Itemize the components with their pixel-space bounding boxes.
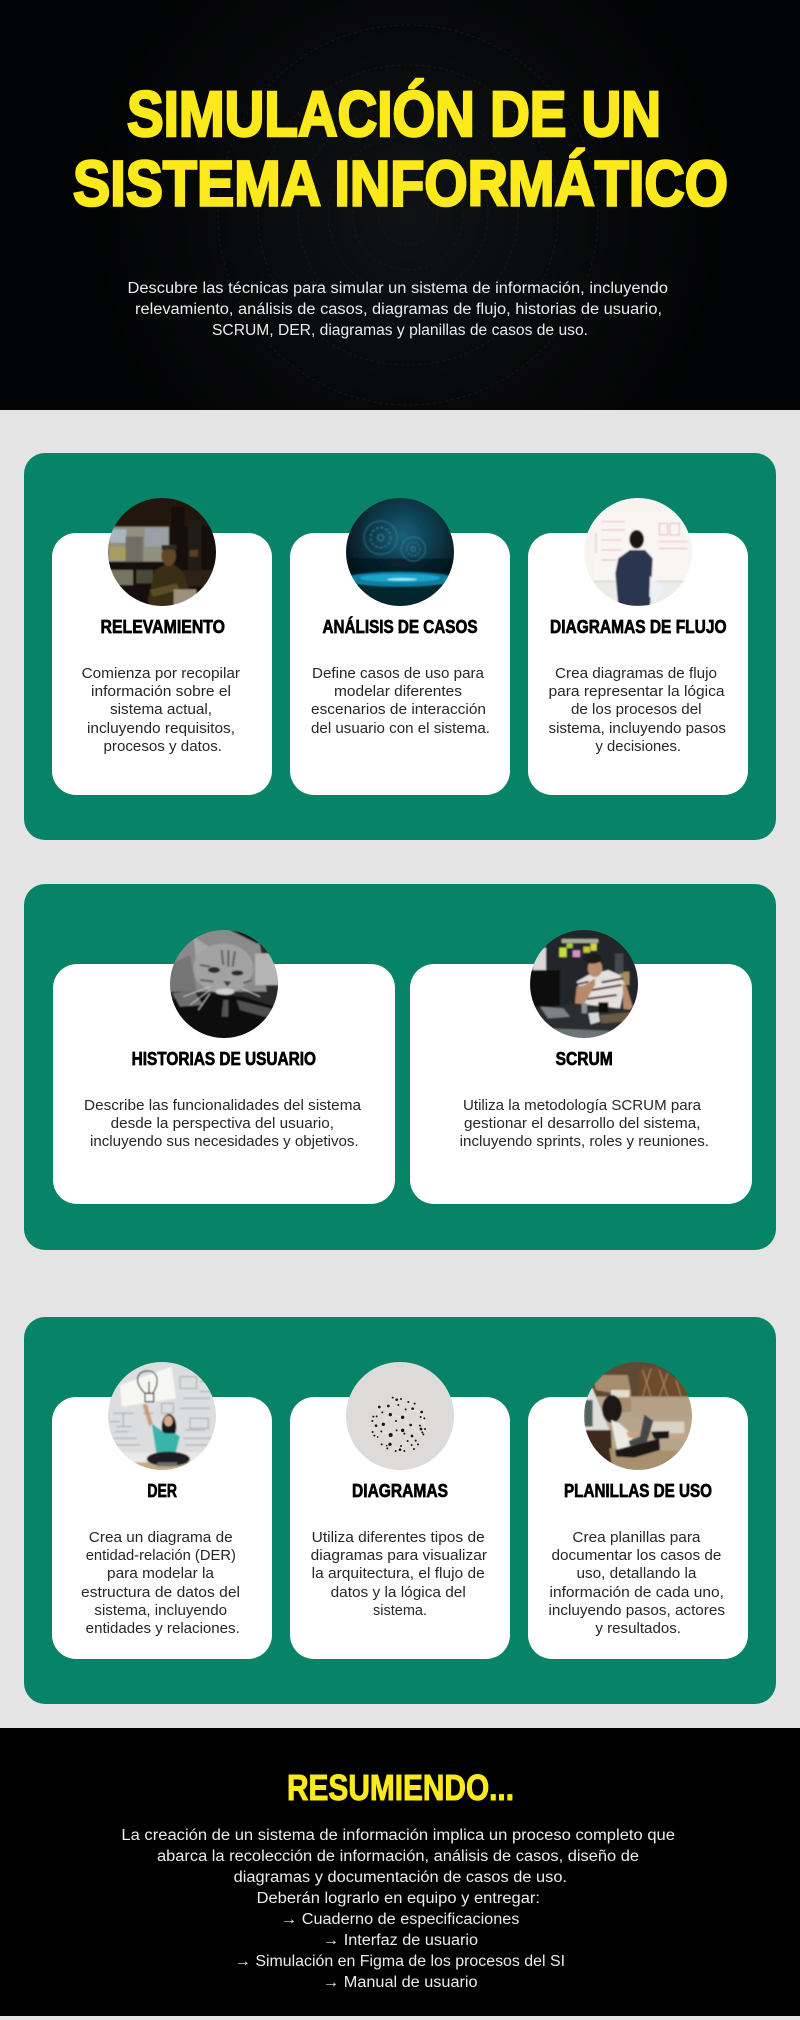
heading: DER — [147, 1480, 177, 1501]
footer text: → Cuaderno de especificaciones — [281, 1911, 520, 1928]
body text: Define casos de uso para — [312, 665, 485, 682]
photo: man at whiteboard — [584, 498, 692, 606]
body text: para modelar la — [107, 1565, 215, 1582]
body text — [548, 665, 726, 755]
footer text: → Manual de usuario — [323, 1974, 478, 1991]
body text — [84, 1097, 362, 1150]
body text: Crea un diagrama de — [89, 1529, 233, 1546]
body text: del usuario con el sistema. — [311, 720, 490, 737]
card: diagramas de flujo — [528, 490, 748, 795]
body text: incluyendo pasos, actores — [548, 1602, 725, 1619]
footer text: → Interfaz de usuario — [323, 1932, 478, 1949]
photo: developer at desk — [530, 930, 638, 1038]
footer text: Deberán lograrlo en equipo y entregar: — [257, 1890, 540, 1907]
body text — [311, 1529, 487, 1619]
body text: la arquitectura, el flujo de — [312, 1565, 485, 1582]
body text: Comienza por recopilar — [82, 665, 240, 682]
body text: sistema. — [373, 1602, 427, 1619]
body text: sistema, incluyendo — [94, 1602, 227, 1619]
body text: y resultados. — [595, 1620, 681, 1637]
heading: HISTORIAS DE USUARIO — [132, 1048, 316, 1069]
panel: first row — [24, 453, 776, 840]
body text — [82, 665, 240, 755]
body text: desde la perspectiva del usuario, — [111, 1115, 334, 1132]
title: SIMULACIÓN DE UN — [127, 78, 661, 150]
heading: RELEVAMIENTO — [100, 616, 225, 637]
body text: datos y la lógica del — [331, 1584, 466, 1601]
card: diagramas — [290, 1355, 510, 1659]
heading: DIAGRAMAS — [352, 1480, 448, 1501]
footer band — [0, 1728, 800, 2016]
body text: Describe las funcionalidades del sistema — [84, 1097, 362, 1114]
body text — [81, 1529, 240, 1637]
footer text: diagramas y documentación de casos de uso. — [234, 1869, 567, 1886]
intro text: SCRUM, DER, diagramas y planillas de casos de uso. — [212, 322, 588, 339]
body text: Crea planillas para — [572, 1529, 701, 1546]
card: der — [52, 1355, 272, 1659]
body text: sistema actual, — [110, 701, 212, 718]
heading: ANÁLISIS DE CASOS — [322, 616, 478, 637]
body text: entidad-relación (DER) — [86, 1547, 236, 1564]
panel: second row — [24, 884, 776, 1250]
body text: incluyendo sprints, roles y reuniones. — [460, 1133, 709, 1150]
body text: entidades y relaciones. — [86, 1620, 240, 1637]
body text: incluyendo requisitos, — [87, 720, 235, 737]
heading: PLANILLAS DE USO — [564, 1480, 712, 1501]
footer text: → Simulación en Figma de los procesos del SI — [235, 1953, 565, 1970]
header band — [0, 0, 800, 410]
body text: información de cada uno, — [550, 1584, 724, 1601]
heading: DIAGRAMAS DE FLUJO — [550, 616, 726, 637]
photo: blue technology — [346, 498, 454, 606]
card: relevamiento — [52, 490, 272, 795]
intro text — [128, 280, 668, 339]
body text: diagramas para visualizar — [311, 1547, 487, 1564]
body text: uso, detallando la — [576, 1565, 697, 1582]
body text: de los procesos del — [571, 701, 702, 718]
body text: Utiliza la metodología SCRUM para — [463, 1097, 702, 1114]
body text: documentar los casos de — [552, 1547, 721, 1564]
body text: sistema, incluyendo pasos — [548, 720, 726, 737]
body text — [311, 665, 490, 737]
photo: control room — [108, 498, 216, 606]
body text: gestionar el desarrollo del sistema, — [464, 1115, 700, 1132]
body text — [460, 1097, 709, 1150]
intro text: Descubre las técnicas para simular un sistema de información, incluyendo — [128, 280, 668, 297]
photo: woman with lightbulb drawing — [108, 1362, 216, 1470]
body text — [548, 1529, 725, 1637]
footer heading: RESUMIENDO... — [287, 1767, 514, 1808]
body text: y decisiones. — [596, 738, 681, 755]
panel: third row — [24, 1317, 776, 1704]
card: historias de usuario — [53, 925, 395, 1204]
footer text: abarca la recolección de información, análisis de casos, diseño de — [157, 1848, 639, 1865]
body text: incluyendo sus necesidades y objetivos. — [90, 1133, 359, 1150]
card: scrum — [410, 925, 752, 1204]
photo: molecular sphere — [346, 1362, 454, 1470]
footer text — [121, 1827, 675, 1991]
card: analisis de casos — [290, 490, 510, 795]
body text: escenarios de interacción — [311, 701, 486, 718]
title — [73, 78, 728, 220]
card: planillas de uso — [528, 1355, 748, 1659]
footer text: La creación de un sistema de información implica un proceso completo que — [121, 1827, 675, 1844]
body text: procesos y datos. — [104, 738, 222, 755]
photo: cat — [170, 930, 278, 1038]
body text: información sobre el — [91, 683, 231, 700]
body text: para representar la lógica — [548, 683, 725, 700]
body text: Crea diagramas de flujo — [555, 665, 717, 682]
body text: estructura de datos del — [81, 1584, 240, 1601]
heading: SCRUM — [556, 1048, 613, 1069]
body text: modelar diferentes — [334, 683, 462, 700]
intro text: relevamiento, análisis de casos, diagramas de flujo, historias de usuario, — [135, 301, 662, 318]
body text: Utiliza diferentes tipos de — [312, 1529, 485, 1546]
photo: woman with laptop — [584, 1362, 692, 1470]
